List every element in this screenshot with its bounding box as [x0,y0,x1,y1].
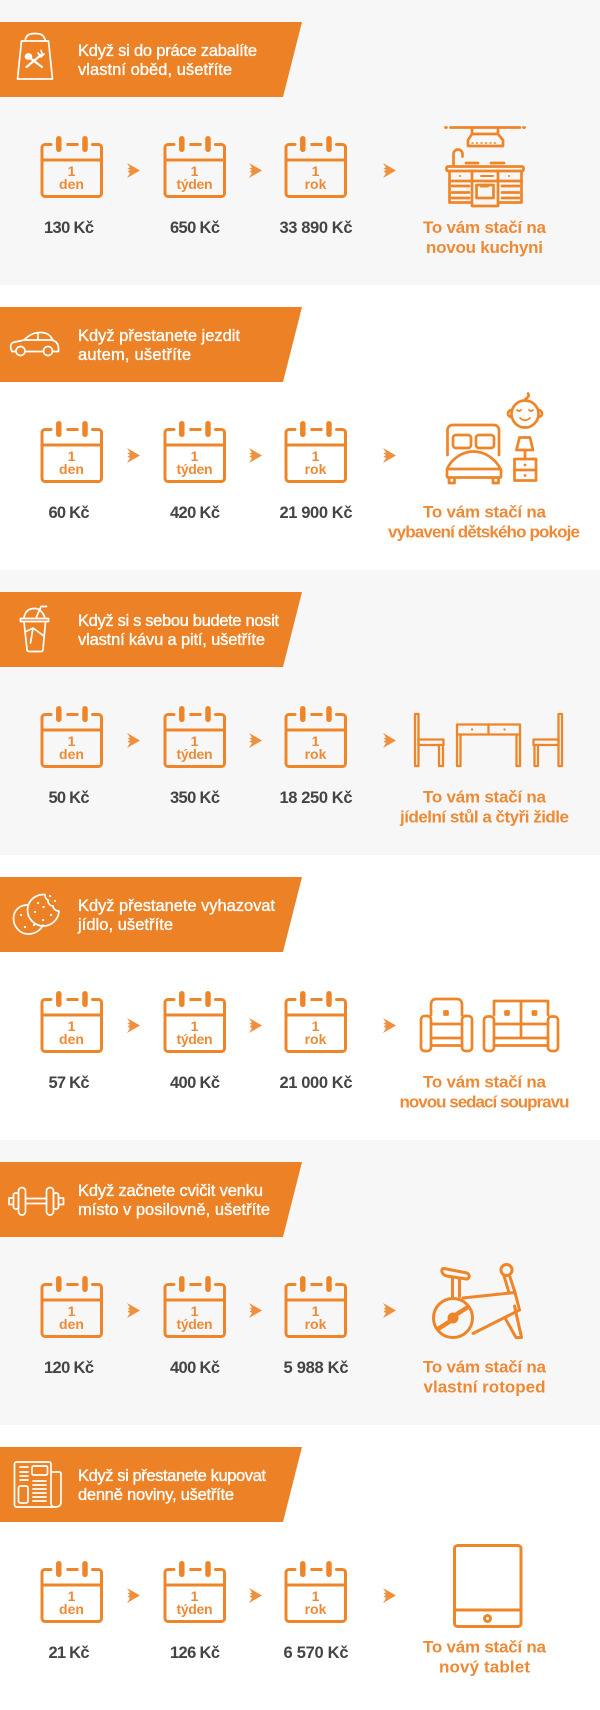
arrow [249,448,262,463]
calendar: year [286,139,346,196]
calendar: day: 1 [68,1588,76,1604]
banner: food waste [0,877,302,952]
calendar: year [286,709,346,766]
calendar: year [286,424,346,482]
heading: car: Když přestanete jezdit [78,327,240,345]
icon: newspaper [14,1462,61,1507]
panel: car [0,285,600,570]
icon: dumbbell [9,1188,64,1215]
calendar: year: rok [305,746,327,762]
arrow [383,1588,396,1603]
result text: kids room: To vám stačí na [423,502,547,522]
calendar: week: 1 [191,1018,199,1034]
values: coffee: 18 250 Kč [280,789,352,807]
values: food waste [48,1074,352,1092]
icon: lunch bag [18,34,52,79]
heading: coffee: vlastní kávu a pití, ušetříte [78,631,265,649]
banner: lunch [0,22,302,97]
calendar: year: rok [305,1601,327,1617]
arrow [127,1588,140,1603]
calendar: day: 1 [68,733,76,749]
arrow [249,1588,262,1603]
calendar: year: 1 [312,1303,320,1319]
calendar: day: 1 [68,448,76,464]
arrow [249,1303,262,1318]
result text: sofa: To vám stačí na [423,1072,547,1092]
arrow [249,733,262,748]
calendar: day [42,139,102,196]
heading: lunch: vlastní oběd, ušetříte [78,61,232,79]
result text: tablet [423,1638,547,1676]
values: gym: 400 Kč [170,1359,220,1377]
icon: cookies [14,894,59,934]
heading: newspaper: Když si přestanete kupovat [78,1467,266,1485]
calendar: year: 1 [312,163,320,179]
values: coffee [48,789,352,807]
heading: gym: místo v posilovně, ušetříte [78,1201,270,1219]
result text: tablet: To vám stačí na [423,1638,547,1656]
heading: gym: Když začnete cvičit venku [78,1182,263,1200]
calendar: year: 1 [312,448,320,464]
values: gym: 120 Kč [44,1359,94,1377]
icon: exercise bike [434,1264,522,1338]
calendar: day: den [59,746,84,762]
banner: newspaper [0,1447,302,1522]
calendar: week: týden [176,1031,212,1047]
result text: sofa [400,1072,570,1112]
arrow [127,1303,140,1318]
heading: coffee: Když si s sebou budete nosit [78,612,279,630]
result text: kids room [388,502,580,542]
banner: car [0,307,302,382]
values: lunch [44,219,352,237]
result text: dining set [399,788,569,826]
calendar: day: den [59,1601,84,1617]
calendar: day: den [59,1316,84,1332]
calendar: week: 1 [191,1303,199,1319]
calendar: week [165,709,224,766]
values: gym [44,1359,348,1377]
icon: tablet [454,1546,521,1626]
heading: newspaper [78,1467,266,1504]
panel: coffee [0,570,600,855]
values: car: 60 Kč [48,504,90,522]
values: food waste: 21 000 Kč [280,1074,352,1092]
result text: bike: To vám stačí na [423,1358,547,1376]
result text: tablet: nový tablet [439,1658,530,1676]
result text: bike: vlastní rotoped [424,1378,546,1396]
calendar: year [286,1279,346,1336]
heading: lunch [78,42,257,79]
arrow [127,163,140,178]
calendar: year: 1 [312,1588,320,1604]
values: car: 21 900 Kč [280,504,352,522]
calendar: week: týden [176,1601,212,1617]
result text: kitchen [423,218,547,257]
values: food waste: 57 Kč [48,1074,90,1092]
arrow [127,448,140,463]
result text: kids room: vybavení dětského pokoje [388,522,580,542]
arrow [127,1018,140,1033]
values: car [48,504,352,522]
calendar: year: rok [305,1031,327,1047]
values: newspaper: 21 Kč [48,1644,90,1662]
icon: armchair and sofa [421,999,558,1051]
calendar: day: 1 [68,1303,76,1319]
heading: newspaper: denně noviny, ušetříte [78,1486,234,1504]
calendar: week: 1 [191,448,199,464]
result text: dining set: jídelní stůl a čtyři židle [399,808,569,826]
calendar: year: rok [305,1316,327,1332]
values: car: 420 Kč [170,504,220,522]
heading: car [78,327,240,364]
heading: food waste: jídlo, ušetříte [77,916,173,934]
result text: bike [423,1358,547,1396]
result text: kitchen: To vám stačí na [423,218,547,237]
icon: drink cup [20,606,48,652]
calendar: week: týden [176,461,212,477]
calendar: week [165,994,224,1052]
result text: dining set: To vám stačí na [423,788,547,806]
calendar: week: týden [176,176,212,192]
result text: kitchen: novou kuchyni [426,238,543,257]
panel: food waste [0,855,600,1140]
arrow [249,1018,262,1033]
values: gym: 5 988 Kč [284,1359,348,1377]
calendar: day: den [59,461,84,477]
arrow [383,1018,396,1033]
calendar: week: 1 [191,1588,199,1604]
calendar: week [165,1279,224,1336]
calendar: year [286,994,346,1052]
heading: lunch: Když si do práce zabalíte [78,42,257,60]
icon: car [11,332,59,356]
calendar: day [42,424,102,482]
values: coffee: 50 Kč [48,789,90,807]
values: food waste: 400 Kč [170,1074,220,1092]
calendar: week: 1 [191,163,199,179]
arrow [383,1303,396,1318]
heading: car: autem, ušetříte [78,346,191,364]
calendar: day: den [59,176,84,192]
calendar: week: týden [176,746,212,762]
result text: sofa: novou sedací soupravu [400,1092,570,1112]
arrow [249,163,262,178]
calendar: year: 1 [312,733,320,749]
icon: bed, baby, lamp [447,394,542,483]
icon: kitchen [446,128,524,206]
values: lunch: 650 Kč [170,219,220,237]
panel: gym [0,1140,600,1425]
calendar: year: rok [305,176,327,192]
calendar: year [286,1564,346,1622]
calendar: day [42,1564,102,1622]
calendar: week [165,1564,224,1622]
banner: coffee [0,592,302,667]
arrow [127,733,140,748]
calendar: year: rok [305,461,327,477]
calendar: day: den [59,1031,84,1047]
heading: food waste: Když přestanete vyhazovat [78,897,275,915]
calendar: day [42,994,102,1052]
calendar: day: 1 [68,1018,76,1034]
calendar: day [42,1279,102,1336]
heading: coffee [78,612,279,649]
values: coffee: 350 Kč [170,789,220,807]
calendar: week: týden [176,1316,212,1332]
panel: newspaper [0,1425,600,1710]
arrow [383,448,396,463]
calendar: week [165,139,224,196]
heading: food waste [77,897,275,934]
arrow [383,733,396,748]
calendar: day [42,709,102,766]
values: newspaper: 126 Kč [170,1644,220,1662]
heading: gym [78,1182,270,1219]
values: lunch: 130 Kč [44,219,94,237]
calendar: week [165,424,224,482]
calendar: week: 1 [191,733,199,749]
arrow [383,163,396,178]
values: newspaper: 6 570 Kč [284,1644,348,1662]
banner: gym [0,1162,302,1237]
values: newspaper [48,1644,348,1662]
icon: dining table and chairs [415,714,562,766]
calendar: day: 1 [68,163,76,179]
values: lunch: 33 890 Kč [280,219,352,237]
panel: lunch [0,0,600,285]
calendar: year: 1 [312,1018,320,1034]
